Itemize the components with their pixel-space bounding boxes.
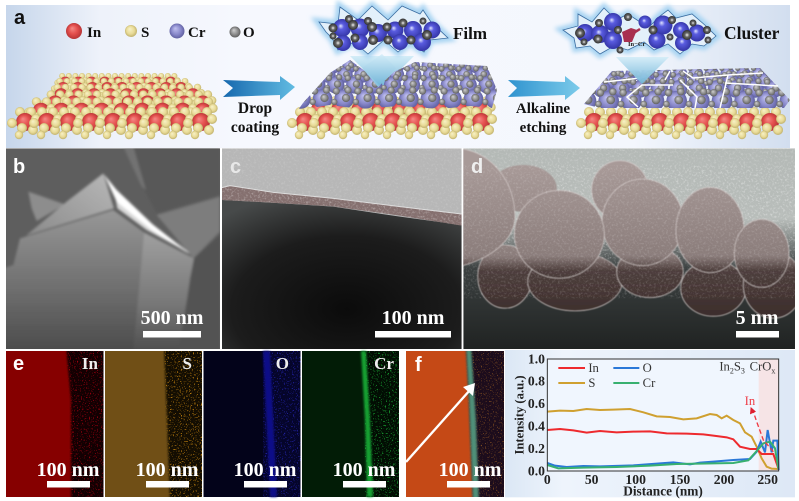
legend: Cr xyxy=(643,376,656,390)
line chart: intensity vs distance xyxy=(505,350,795,498)
arrow: line scan direction xyxy=(406,383,475,462)
panel f: overlay map with line scan arrow xyxy=(400,345,504,501)
legend: atom key xyxy=(66,23,255,41)
map: O: 100 nm xyxy=(234,459,297,481)
region labels: S xyxy=(734,360,741,374)
map: S: S xyxy=(183,354,192,373)
y axis tick labels: 1.0 xyxy=(528,351,545,366)
panel b: SEM image xyxy=(3,145,220,352)
cracked cluster lattice slab xyxy=(572,65,799,139)
annotation: In trend arrow xyxy=(745,394,773,452)
cluster molecule inset with In-Cr bond xyxy=(563,8,716,54)
region labels: In xyxy=(719,360,730,374)
panel letter e: e xyxy=(13,353,24,375)
y axis tick labels xyxy=(528,351,545,478)
x axis tick labels: 0 xyxy=(544,472,551,487)
film molecule inset xyxy=(319,6,448,54)
y axis tick labels: 0.6 xyxy=(528,396,545,411)
arrow: drop coating xyxy=(223,76,295,100)
y axis title: Intensity (a.u.) xyxy=(512,375,526,455)
panel e: elemental maps xyxy=(0,345,399,501)
map: Cr xyxy=(302,351,399,497)
label: alkaline etching: etching xyxy=(520,120,567,136)
arrow: alkaline etching xyxy=(508,76,580,100)
panel letter b: b xyxy=(13,156,25,178)
y axis tick labels: 0.0 xyxy=(528,463,545,478)
legend: atom key: In xyxy=(87,25,102,41)
region labels: 2 xyxy=(730,366,734,375)
panel letter c: c xyxy=(230,156,241,178)
legend: atom key: O xyxy=(243,25,255,41)
y axis tick labels: 0.2 xyxy=(528,441,545,456)
scale bar c: 100 nm: 100 nm xyxy=(382,307,445,329)
y axis tick labels: 0.8 xyxy=(528,374,545,389)
panel d: HRTEM image xyxy=(460,148,799,349)
series: O xyxy=(547,430,779,470)
panel letter d: d xyxy=(471,156,483,178)
label: drop coating: Drop xyxy=(238,100,272,117)
panel a: synthesis schematic xyxy=(6,5,799,148)
region labels: x xyxy=(771,366,775,375)
bare In2S3 lattice slab xyxy=(7,73,218,139)
x axis tick labels: 200 xyxy=(714,472,734,487)
map: S xyxy=(100,345,202,501)
y axis tick labels: 0.4 xyxy=(528,419,545,434)
panel letter a: a xyxy=(14,7,26,29)
legend: S xyxy=(588,376,595,390)
panel letter f: f xyxy=(415,354,422,376)
panel c: TEM image xyxy=(222,148,462,352)
series: Cr xyxy=(547,442,778,468)
series: In xyxy=(547,429,778,468)
x axis title: Distance (nm) xyxy=(623,483,703,498)
legend: atom key: S xyxy=(141,25,149,41)
x axis tick labels xyxy=(544,472,778,487)
light beam from cluster xyxy=(616,57,669,84)
x axis tick labels: 50 xyxy=(585,472,599,487)
legend xyxy=(558,361,656,390)
scale bar f: 100 nm: 100 nm xyxy=(439,459,502,481)
film-coated lattice slab xyxy=(287,54,505,139)
label: alkaline etching: Alkaline xyxy=(516,101,570,117)
label: cluster: Cluster xyxy=(724,23,780,43)
x axis tick labels: 150 xyxy=(670,472,690,487)
map: In: In xyxy=(82,354,99,373)
region labels: CrO xyxy=(750,360,771,374)
cluster molecule inset with In-Cr bond: In−Cr xyxy=(628,41,646,48)
map: Cr: 100 nm xyxy=(333,459,396,481)
label: film: Film xyxy=(453,24,487,43)
legend: O xyxy=(643,361,652,375)
map: S: 100 nm xyxy=(136,459,199,481)
map: O xyxy=(204,351,300,497)
map: O: O xyxy=(276,354,289,373)
scale bar b: 500 nm: 500 nm xyxy=(141,307,204,329)
map: In: 100 nm xyxy=(37,459,100,481)
legend: atom key: Cr xyxy=(188,25,206,41)
legend: In xyxy=(588,361,600,375)
light beam from film xyxy=(350,56,414,88)
map: In xyxy=(0,345,104,501)
scale bar c: 100 nm xyxy=(375,307,451,338)
label: drop coating: coating xyxy=(231,119,279,136)
region labels: 3 xyxy=(741,366,745,375)
plot frame xyxy=(547,359,779,471)
x axis tick labels: 250 xyxy=(757,472,778,487)
map: Cr: Cr xyxy=(374,354,394,373)
x axis tick labels: 100 xyxy=(625,472,646,487)
annotation: In trend arrow: In xyxy=(745,394,756,408)
series: S xyxy=(547,409,778,469)
scale bar d: 5 nm: 5 nm xyxy=(736,307,779,329)
